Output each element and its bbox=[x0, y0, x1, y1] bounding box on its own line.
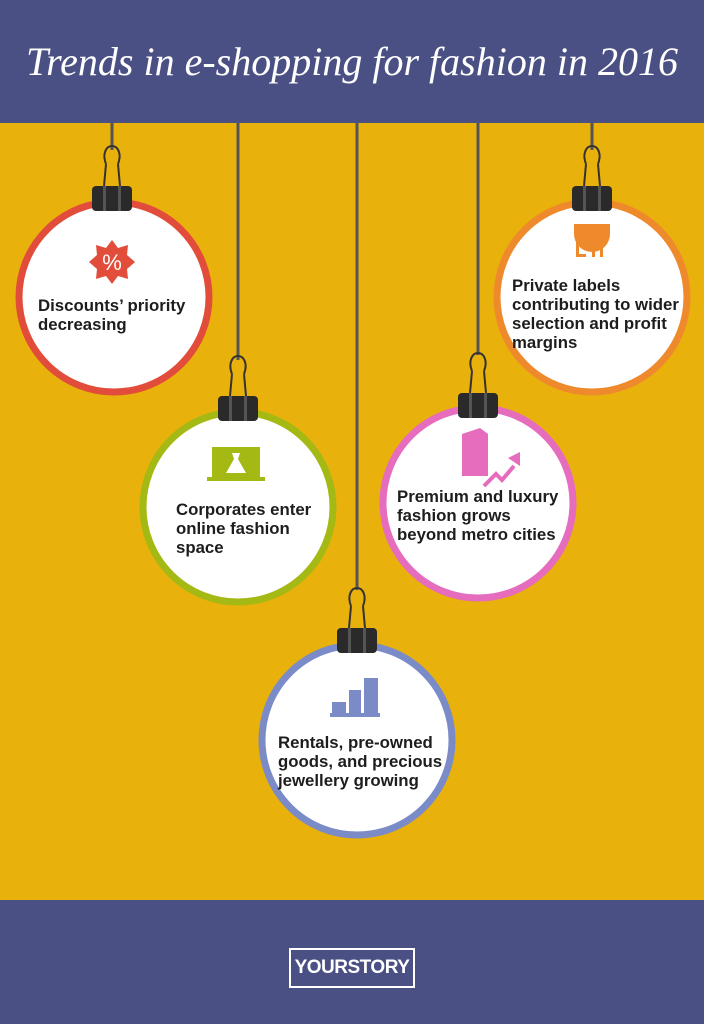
title: Trends in e-shopping for fashion in 2016 bbox=[26, 39, 678, 84]
ornament: premium bbox=[383, 123, 573, 598]
icon: percent badge bbox=[89, 240, 135, 284]
header bbox=[0, 0, 704, 123]
text: corporates: Corporates enter bbox=[176, 500, 311, 519]
text: premium bbox=[397, 487, 558, 544]
icon: percent badge: % bbox=[102, 250, 122, 275]
text: rentals: Rentals, pre-owned bbox=[278, 733, 433, 752]
text: premium: fashion grows bbox=[397, 506, 511, 525]
text: private labels: Private labels bbox=[512, 276, 620, 295]
text: corporates: online fashion bbox=[176, 519, 290, 538]
text: corporates bbox=[176, 500, 311, 557]
text: premium: Premium and luxury bbox=[397, 487, 558, 506]
text: discounts bbox=[38, 296, 186, 334]
text: corporates: space bbox=[176, 538, 224, 557]
text: private labels: selection and profit bbox=[512, 314, 667, 333]
text: private labels: margins bbox=[512, 333, 577, 352]
logo: YOURSTORY bbox=[295, 957, 409, 978]
icon: shop bbox=[574, 224, 610, 257]
text: private labels bbox=[512, 276, 679, 352]
icon: building arrow bbox=[462, 428, 520, 486]
text: discounts: decreasing bbox=[38, 315, 127, 334]
icon: laptop dress bbox=[207, 447, 265, 481]
text: private labels: contributing to wider bbox=[512, 295, 679, 314]
icon: bars bbox=[330, 678, 380, 717]
text: rentals: goods, and precious bbox=[278, 752, 442, 771]
text: premium: beyond metro cities bbox=[397, 525, 556, 544]
ornament: corporates bbox=[143, 123, 333, 602]
text: rentals: jewellery growing bbox=[278, 771, 419, 790]
text: rentals bbox=[278, 733, 442, 790]
ornament: private labels bbox=[497, 123, 687, 392]
ornament: rentals bbox=[262, 123, 452, 835]
footer bbox=[0, 900, 704, 1024]
text: discounts: Discounts’ priority bbox=[38, 296, 185, 315]
ornament: discounts bbox=[19, 123, 209, 392]
logo bbox=[289, 948, 415, 988]
